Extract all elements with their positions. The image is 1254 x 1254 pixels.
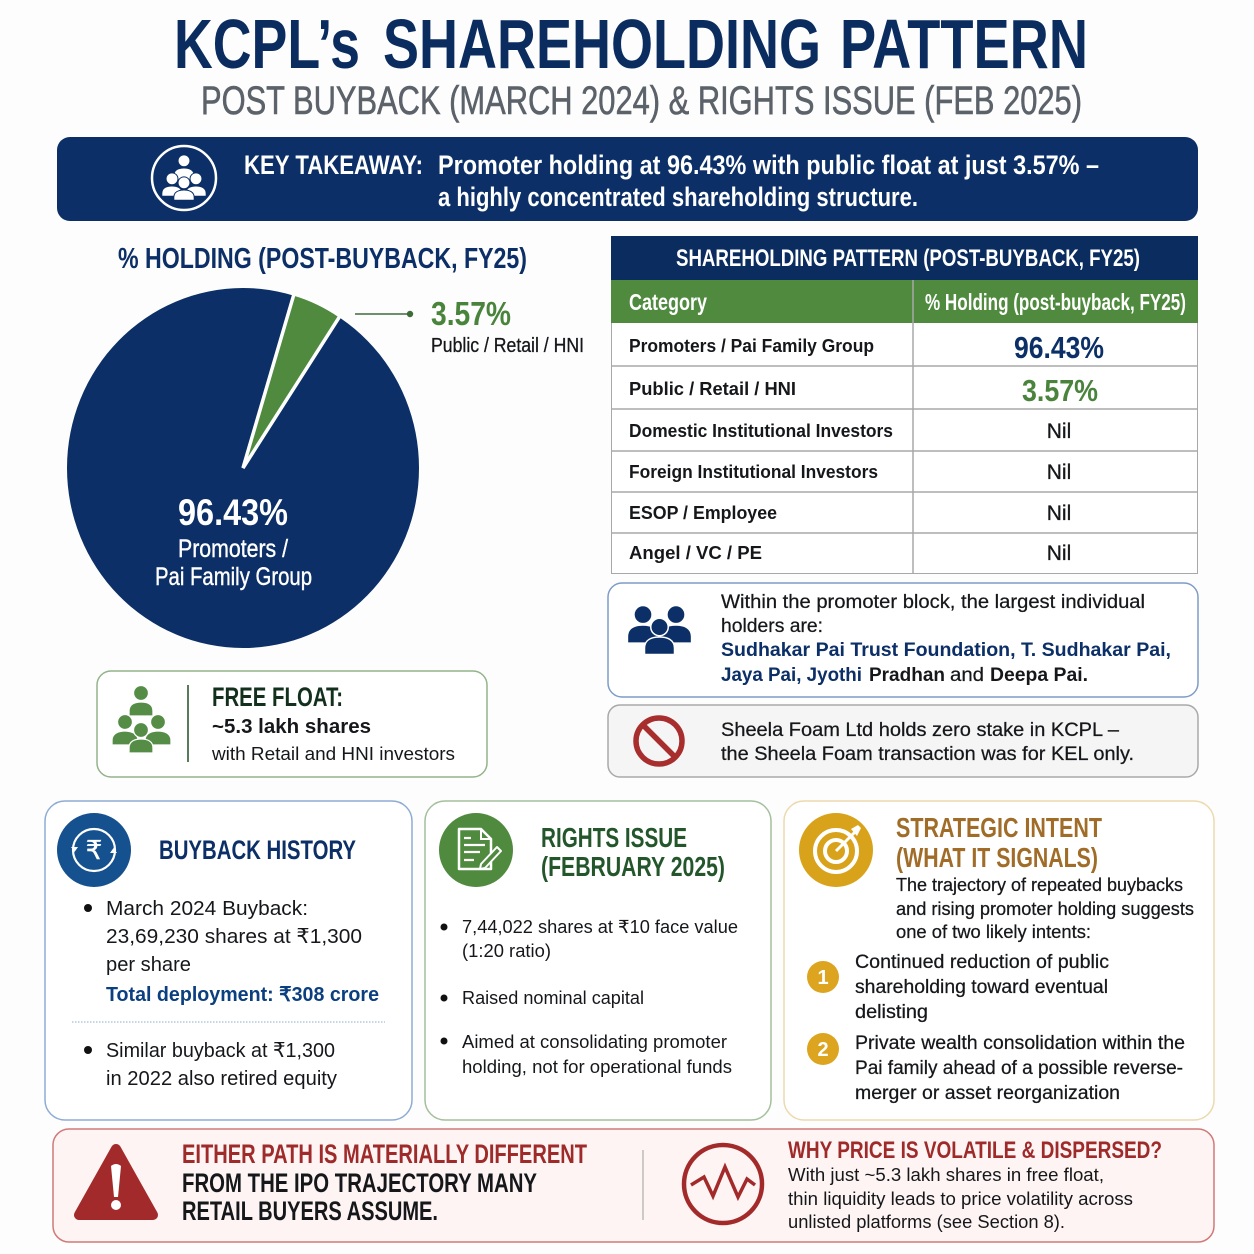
takeaway text: Promoter holding at 96.43% with public float at just 3.57% – [438, 150, 1099, 180]
buyback item: March 2024: 23,69,230 shares at ₹1,300 [106, 925, 362, 948]
row: angel: Nil [1047, 542, 1071, 565]
row: public [629, 373, 1098, 408]
rights issue heading: RIGHTS ISSUE [541, 822, 687, 853]
rights issue heading [541, 822, 725, 882]
row: foreign institutions: Foreign Institutional Investors [629, 462, 878, 482]
promoter block text: Deepa Pai. [990, 664, 1088, 686]
Sheela Foam text [721, 719, 1134, 765]
panel: promoter block [608, 583, 1198, 697]
intent 1: 1 [817, 967, 829, 989]
promoter block text: Pradhan [869, 664, 945, 686]
buyback item: March 2024: per share [106, 953, 191, 976]
promoter label: 96.43% [178, 492, 288, 533]
free float text [211, 682, 455, 764]
pie chart heading: % HOLDING (POST-BUYBACK, FY25) [118, 243, 527, 275]
callout: public slice: Public / Retail / HNI [431, 335, 584, 357]
promoter label: Pai Family Group [155, 563, 312, 591]
free float text: ~5.3 lakh shares [212, 716, 371, 738]
buyback item: March 2024 [84, 897, 379, 1006]
rights item: aim [440, 1032, 732, 1077]
takeaway label: KEY TAKEAWAY: [244, 150, 423, 180]
panel: Sheela Foam note [608, 705, 1198, 777]
icon: rupee cycle [57, 813, 131, 887]
shareholding table [611, 236, 1198, 574]
takeaway text: a highly concentrated shareholding structure. [438, 182, 918, 212]
rights issue heading: (FEBRUARY 2025) [541, 851, 725, 882]
Sheela Foam text: Sheela Foam Ltd holds zero stake in KCPL – [721, 719, 1119, 741]
icon: volatility pulse [684, 1145, 762, 1223]
Sheela Foam text: the Sheela Foam transaction was for KEL only. [721, 743, 1134, 765]
volatility text: With just ~5.3 lakh shares in free float, [788, 1165, 1104, 1185]
row: domestic institutions: Domestic Institutional Investors [629, 421, 893, 441]
row: promoters: 96.43% [1014, 330, 1104, 365]
title: SHAREHOLDING [383, 5, 821, 83]
icon: prohibition sign [636, 718, 682, 764]
strategic intent intro: and rising promoter holding suggests [896, 899, 1194, 919]
promoter block text [721, 591, 1171, 686]
icon: document and pen [439, 813, 513, 887]
row: foreign institutions [629, 461, 1071, 484]
row: angel [629, 542, 1071, 565]
panel: buyback history [45, 801, 412, 1120]
strategic intent heading [896, 812, 1102, 873]
buyback item: March 2024: Total deployment: ₹308 crore [106, 984, 379, 1006]
promoter block text: holders are: [721, 615, 823, 637]
promoter block text: and [950, 664, 984, 686]
row: ESOP: Nil [1047, 502, 1071, 525]
panel: bottom warning [53, 1129, 1214, 1242]
buyback item: 2022 [84, 1039, 338, 1090]
pie chart [67, 288, 419, 648]
volatility text [788, 1137, 1162, 1232]
warning text: EITHER PATH IS MATERIALLY DIFFERENT [182, 1139, 587, 1169]
icon: people in circle [152, 146, 216, 210]
buyback item: 2022: in 2022 also retired equity [106, 1067, 338, 1090]
row: angel: Angel / VC / PE [629, 543, 762, 563]
promoter label [155, 492, 312, 591]
promoter label: Promoters / [178, 535, 288, 563]
warning text [182, 1139, 587, 1226]
row: public: 3.57% [1022, 373, 1098, 408]
icon: navy people [627, 606, 692, 654]
callout: public slice: 3.57% [431, 295, 511, 332]
intent 2 [807, 1033, 1185, 1104]
promoter block text: Sudhakar Pai Trust Foundation, T. Sudhakar Pai, [721, 639, 1171, 661]
icon: green people group [112, 686, 171, 753]
panel: rights issue [425, 801, 771, 1120]
warning text: FROM THE IPO TRAJECTORY MANY [182, 1168, 537, 1198]
intent 2: 2 [817, 1039, 829, 1061]
strategic intent intro: one of two likely intents: [896, 922, 1091, 942]
title [174, 5, 1088, 83]
icon: target and arrow [799, 813, 873, 887]
intent 2: Private wealth consolidation within the [855, 1033, 1185, 1054]
row: ESOP: ESOP / Employee [629, 503, 777, 523]
free float text: FREE FLOAT: [212, 682, 343, 712]
table column headers [611, 280, 1198, 323]
rights item: shares: (1:20 ratio) [462, 941, 551, 961]
free float text: with Retail and HNI investors [211, 744, 455, 764]
intent 2: Pai family ahead of a possible reverse- [855, 1058, 1183, 1079]
strategic intent heading: (WHAT IT SIGNALS) [896, 842, 1098, 873]
row: public: Public / Retail / HNI [629, 379, 796, 399]
table title bar [611, 236, 1198, 280]
callout: public slice [355, 295, 584, 357]
panel: key takeaway banner [57, 137, 1198, 221]
takeaway text [438, 150, 1099, 212]
rights item: shares [440, 917, 738, 961]
intent 1 [807, 952, 1109, 1023]
volatility text: thin liquidity leads to price volatility across [788, 1189, 1133, 1209]
rights item: aim: Aimed at consolidating promoter [462, 1032, 727, 1052]
slice: public 3.57% [243, 294, 340, 468]
row: domestic institutions: Nil [1047, 420, 1071, 443]
table column headers: Category [629, 289, 707, 315]
row: promoters [629, 330, 1104, 365]
intent 2: merger or asset reorganization [855, 1083, 1120, 1104]
buyback item: 2022: Similar buyback at ₹1,300 [106, 1039, 335, 1062]
intent 1: Continued reduction of public [855, 952, 1109, 973]
row: foreign institutions: Nil [1047, 461, 1071, 484]
strategic intent heading: STRATEGIC INTENT [896, 812, 1102, 843]
icon: warning triangle [79, 1149, 153, 1215]
panel: free float [97, 671, 487, 777]
title: KCPL’s [174, 5, 360, 83]
strategic intent intro [896, 875, 1194, 942]
intent 1: shareholding toward eventual [855, 977, 1108, 998]
volatility text: unlisted platforms (see Section 8). [788, 1212, 1065, 1232]
rights item: aim: holding, not for operational funds [462, 1057, 732, 1077]
intent 1: delisting [855, 1002, 928, 1023]
panel: strategic intent [784, 801, 1214, 1120]
row: promoters: Promoters / Pai Family Group [629, 336, 874, 356]
rights item: shares: 7,44,022 shares at ₹10 face value [462, 917, 738, 937]
title: PATTERN [840, 5, 1088, 83]
promoter block text: Within the promoter block, the largest individual [721, 591, 1145, 613]
icon: rupee cycle: ₹ [86, 835, 102, 865]
strategic intent intro: The trajectory of repeated buybacks [896, 875, 1183, 895]
row: domestic institutions [629, 420, 1071, 443]
row: ESOP [629, 502, 1071, 525]
volatility text: WHY PRICE IS VOLATILE & DISPERSED? [788, 1137, 1162, 1164]
rights item: capital: Raised nominal capital [462, 988, 644, 1008]
warning text: RETAIL BUYERS ASSUME. [182, 1196, 438, 1226]
promoter block text: Jaya Pai, Jyothi [721, 664, 862, 686]
buyback item: March 2024: March 2024 Buyback: [106, 897, 308, 920]
buyback heading: BUYBACK HISTORY [159, 835, 356, 865]
